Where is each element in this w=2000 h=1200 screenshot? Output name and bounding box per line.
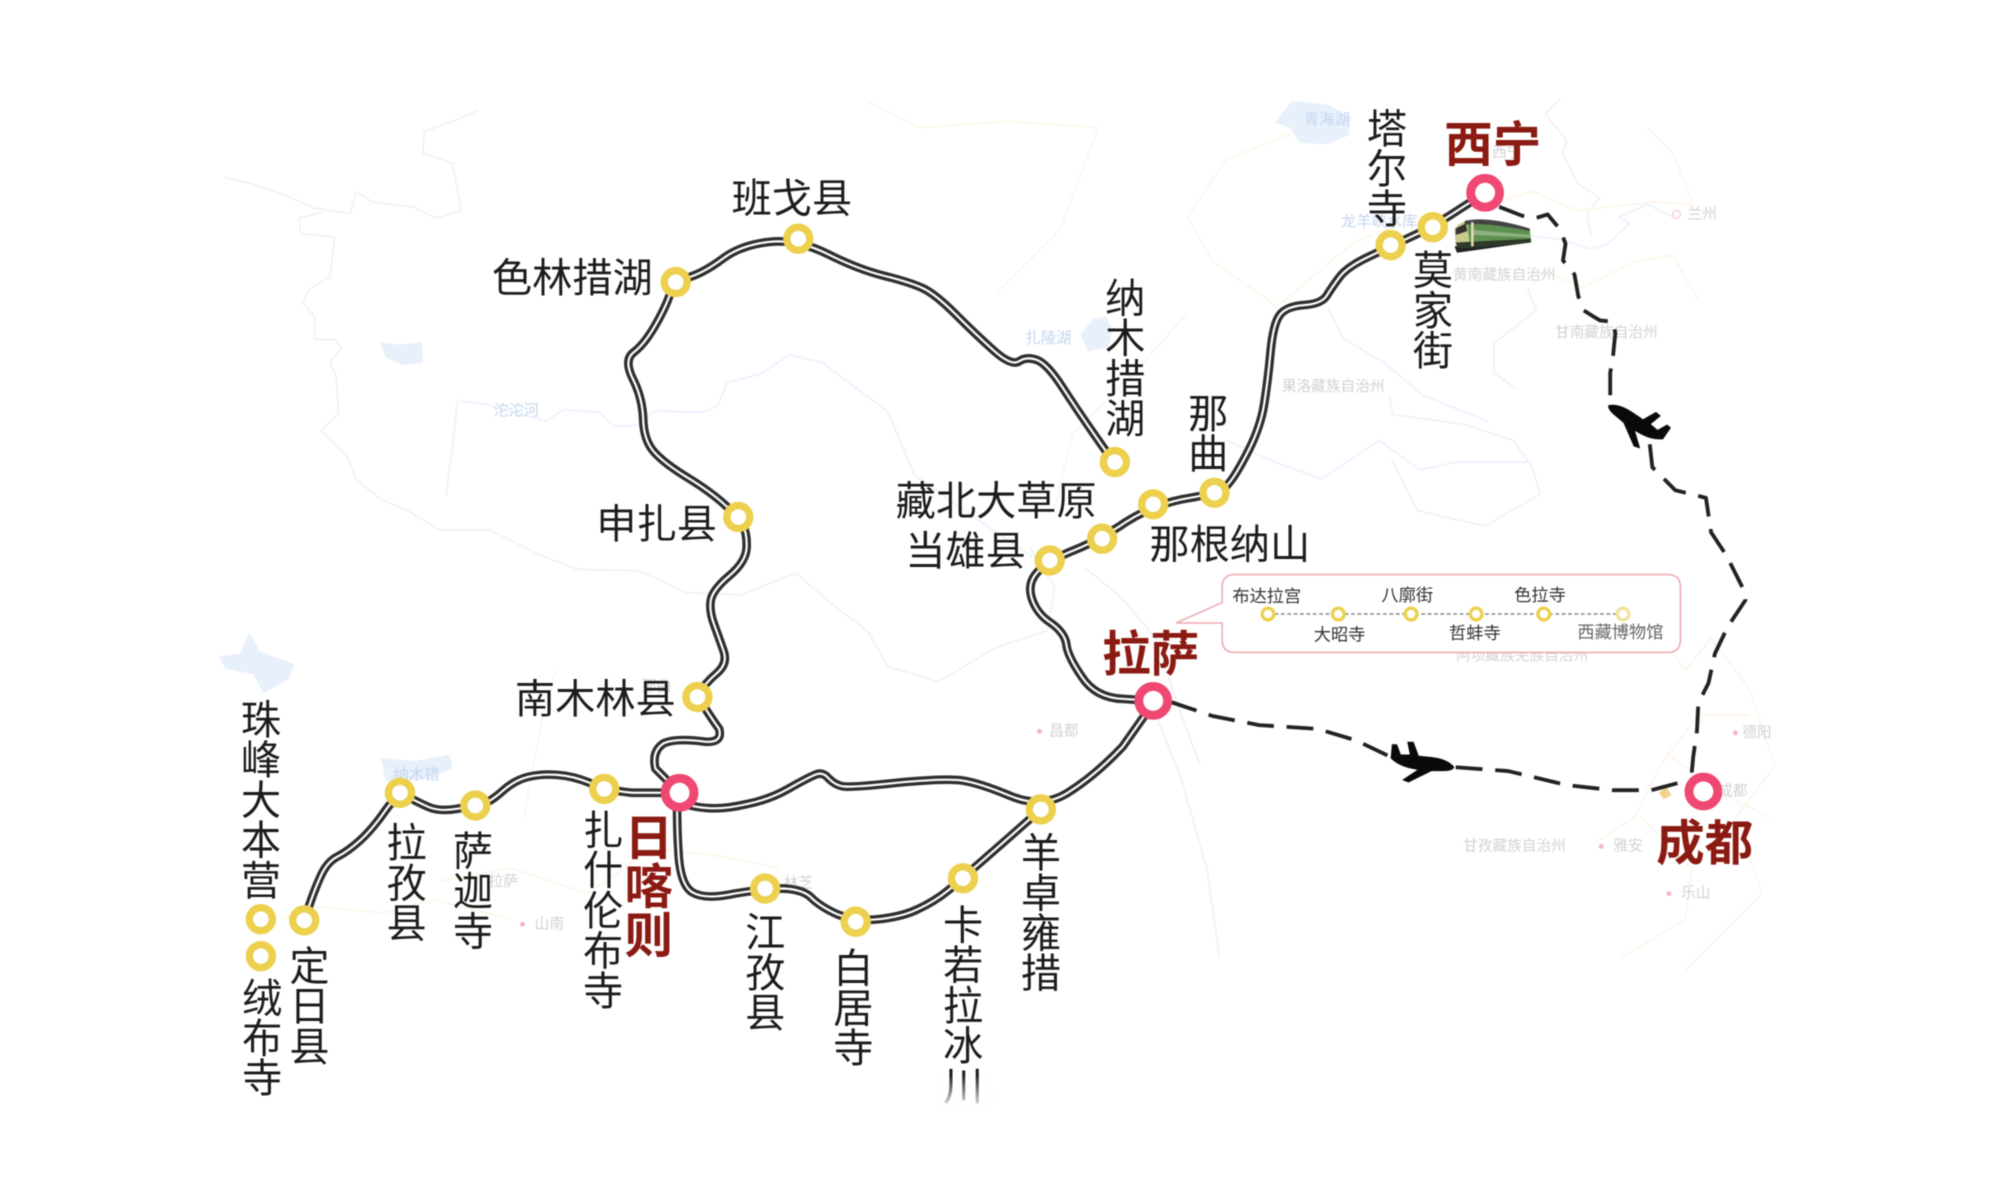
- rivers: [446, 355, 1032, 557]
- stations: [249, 178, 1718, 968]
- major city labels: 拉萨: [1102, 628, 1199, 682]
- vertical station labels: 萨迦寺: [446, 830, 492, 951]
- horizontal station labels: 当雄县: [905, 529, 1026, 574]
- map place names: 甘孜藏族自治州: [1463, 837, 1566, 854]
- roads: [1188, 128, 1693, 306]
- callout: Lhasa attractions: [1176, 574, 1680, 652]
- map place names: 雅安: [1613, 837, 1643, 854]
- railway routes: [304, 193, 1485, 920]
- map place names: 阿坝藏族羌族自治州: [1456, 647, 1588, 664]
- map place names: 青海湖: [1304, 112, 1350, 129]
- icon: airplane north: [1598, 386, 1674, 458]
- icon: airplane east: [1391, 742, 1454, 783]
- map place names: 山南: [535, 915, 564, 932]
- background map: [219, 100, 1775, 970]
- map place names: 西宁: [1492, 144, 1521, 161]
- map place names: 那曲: [642, 678, 671, 695]
- callout: Lhasa attractions: 哲蚌寺: [1449, 623, 1501, 643]
- flight route: Xining to Chengdu: [1499, 207, 1746, 779]
- callout: Lhasa attractions: 色拉寺: [1514, 585, 1566, 605]
- vertical station labels: [235, 108, 1453, 1105]
- vertical station labels: 珠峰大本营: [235, 699, 280, 900]
- horizontal station labels: [492, 177, 1310, 722]
- horizontal station labels: 申扎县: [596, 502, 717, 547]
- vertical station labels: 卡若拉冰川: [937, 904, 982, 1105]
- callout: Lhasa attractions: 八廓街: [1381, 585, 1433, 605]
- vertical station labels: 扎什伦布寺: [577, 809, 622, 1010]
- vertical station labels: 拉孜县: [380, 822, 425, 942]
- vertical station labels: 羊卓雍措: [1015, 832, 1060, 993]
- callout: Lhasa attractions: 大昭寺: [1314, 624, 1365, 644]
- map place names: 扎陵湖: [1026, 330, 1071, 347]
- vertical station labels: 塔尔寺: [1360, 108, 1406, 228]
- provincial borders: [225, 110, 479, 218]
- map place names: 德阳: [1742, 723, 1772, 741]
- vertical station labels: 绒布寺: [236, 977, 281, 1098]
- horizontal station labels: 南木林县: [515, 677, 676, 722]
- map place names: 黄南藏族自治州: [1453, 267, 1556, 284]
- map place names: 沱沱河: [493, 403, 539, 420]
- map place names: 纳木错: [394, 766, 440, 783]
- map place names: 甘南藏族自治州: [1555, 324, 1658, 341]
- vertical station labels: 莫家街: [1406, 249, 1453, 370]
- map place names: 昌都: [1049, 722, 1079, 739]
- map place names: 拉萨: [489, 873, 518, 890]
- map place names: 乐山: [1681, 885, 1710, 902]
- major city labels: [617, 119, 1753, 958]
- horizontal station labels: 色林措湖: [492, 256, 653, 301]
- vertical station labels: 那曲: [1182, 393, 1227, 473]
- map place names: 林芝: [784, 874, 813, 891]
- map place names: 龙羊峡水库: [1341, 214, 1417, 231]
- bottom fade: [932, 1075, 996, 1111]
- map place names: [394, 112, 1772, 932]
- major city labels: 日喀则: [617, 813, 672, 958]
- vertical station labels: 白居寺: [827, 947, 872, 1068]
- major city labels: 成都: [1656, 817, 1753, 871]
- map place names: 兰州: [1687, 205, 1717, 222]
- vertical station labels: 纳木措湖: [1099, 277, 1144, 438]
- horizontal station labels: 藏北大草原: [896, 479, 1097, 524]
- vertical station labels: 定日县: [283, 945, 328, 1066]
- flight route: Lhasa to Chengdu: [1171, 702, 1689, 790]
- callout: Lhasa attractions: 布达拉宫: [1232, 586, 1301, 606]
- map place names: 成都: [1718, 782, 1748, 799]
- horizontal station labels: 那根纳山: [1149, 523, 1310, 568]
- map place names: 果洛藏族自治州: [1282, 378, 1385, 395]
- major city labels: 西宁: [1444, 119, 1541, 173]
- callout: Lhasa attractions: 西藏博物馆: [1577, 622, 1663, 642]
- icon: train: [1454, 219, 1531, 253]
- vertical station labels: 江孜县: [739, 911, 784, 1032]
- horizontal station labels: 班戈县: [732, 177, 852, 222]
- lakes: [219, 101, 1351, 781]
